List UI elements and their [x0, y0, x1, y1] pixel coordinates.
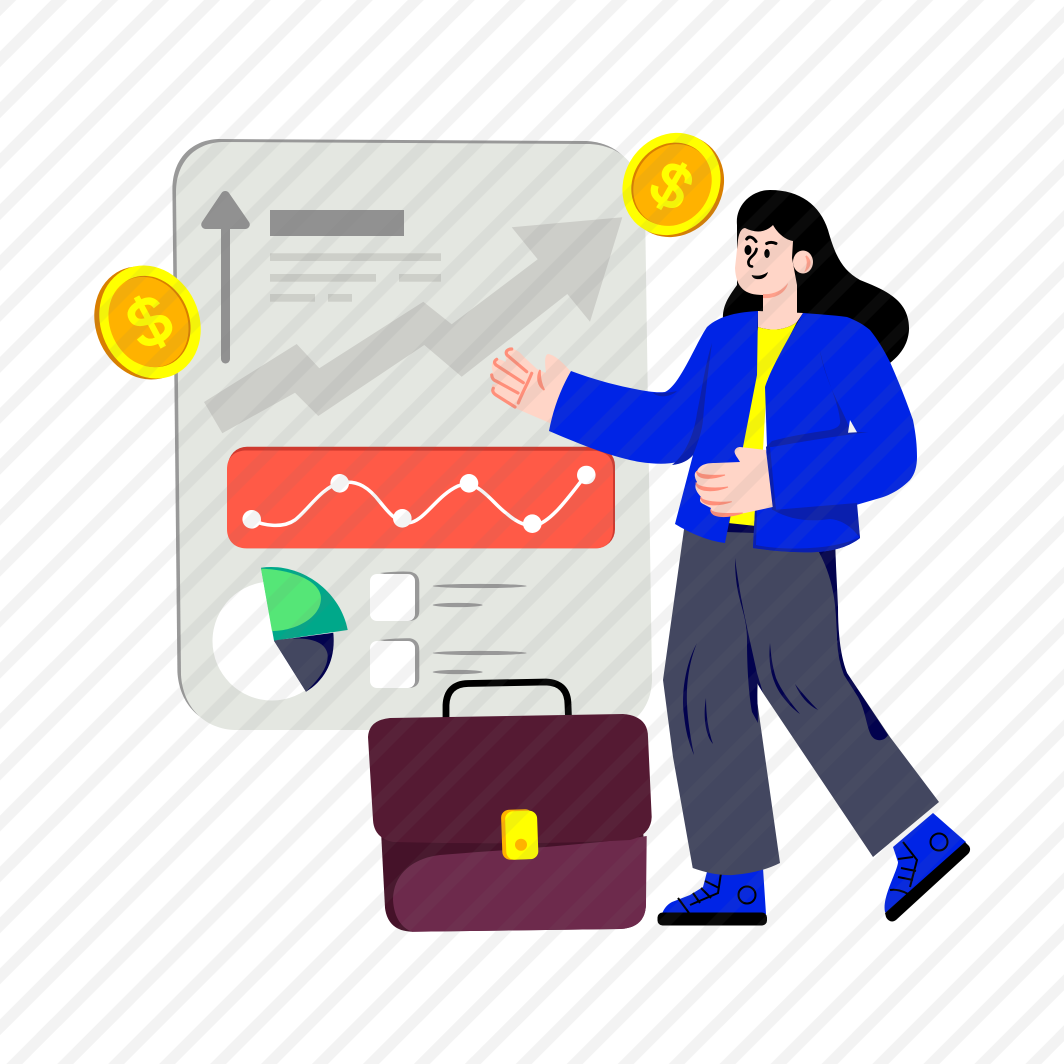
heading bar	[270, 210, 404, 236]
legend item 2	[370, 638, 527, 688]
left shoe	[658, 868, 767, 926]
icon: coin right	[603, 114, 744, 256]
belt	[726, 523, 756, 533]
jacket left half with sleeve	[549, 311, 758, 543]
person	[491, 190, 970, 926]
face and neck	[735, 225, 813, 315]
shirt	[729, 322, 797, 527]
jacket right half with sleeve	[753, 313, 917, 552]
line chart card	[227, 447, 615, 548]
pie chart	[212, 567, 348, 700]
armpit gap	[848, 420, 857, 433]
icon: coin right: $	[639, 148, 703, 225]
icon: coin left	[76, 249, 219, 396]
text lines	[270, 253, 441, 302]
trend arrow	[204, 217, 622, 433]
icon: up arrow	[201, 191, 250, 364]
icon: coin left: $	[115, 279, 184, 364]
raised hand	[491, 349, 571, 424]
pants	[663, 515, 939, 875]
hand on stomach	[695, 447, 773, 517]
briefcase	[368, 682, 652, 932]
hair	[723, 190, 909, 400]
chest skin	[758, 311, 803, 330]
panel: report sheet	[172, 139, 652, 730]
right shoe	[885, 813, 970, 921]
legend item 1	[370, 572, 527, 621]
